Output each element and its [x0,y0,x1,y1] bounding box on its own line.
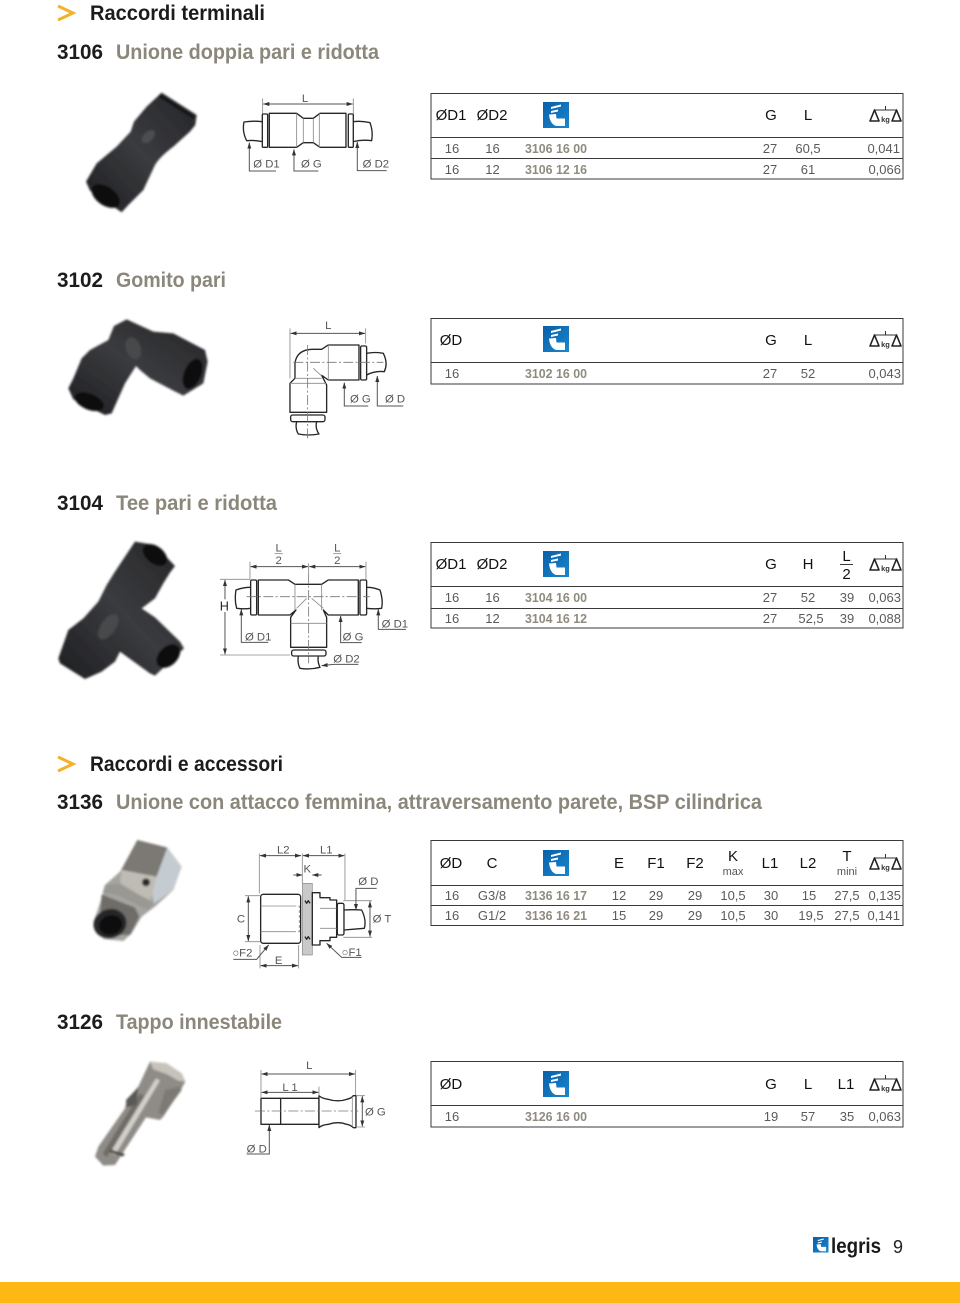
diagram: bulkhead 3136: E [275,955,283,967]
table 3136: 29 [688,888,702,903]
table 3106: 0,041 [867,141,900,156]
table 3104: 52,5 [798,611,824,626]
table 3136: 16 [445,888,459,903]
table 3106: 27 [763,141,777,156]
table 3136: 27,5 [834,888,860,903]
table 3136: 19,5 [798,908,824,923]
table 3106: 3106 12 16 [525,162,587,177]
table 3104: ØD2 [477,556,507,573]
table 3136: 30 [764,908,778,923]
table 3106: 16 [485,141,500,156]
table 3126: L1 [838,1076,854,1093]
diagram: bulkhead 3136: K [304,863,312,875]
table 3106: 0,066 [868,162,901,177]
table 3136: L1 [762,855,778,872]
table 3106: 61 [801,162,815,177]
diagram: plug 3126: Ø D [247,1143,267,1155]
table 3136: 12 [612,888,626,903]
table 3106: G [765,107,777,124]
table 3126: 57 [801,1109,815,1124]
diagram: union 3106: Ø D2 [363,158,389,170]
table 3104: 16 [445,611,459,626]
table 3126 [431,1062,903,1127]
table 3136: 3136 16 21 [525,908,587,923]
diagram: union 3106 [243,93,389,171]
table 3136: 15 [612,908,626,923]
product title 3104: 3104 [57,492,103,515]
table 3106: 60,5 [795,141,821,156]
section heading: Raccordi e accessori: Raccordi e accessori [90,753,283,776]
table 3104: 2 [842,566,851,583]
table 3102: 3102 16 00 [525,366,587,381]
diagram: tee 3104: Ø D1 [245,631,271,643]
table 3136: K [728,848,738,865]
table 3104: 39 [840,590,854,605]
table 3104: 16 [485,590,500,605]
diagram: bulkhead 3136 [232,844,391,968]
table 3104: 39 [840,611,854,626]
table 3106: 16 [445,141,459,156]
table 3102: ØD [440,332,462,349]
table 3102: kg [881,340,890,349]
table 3126: 0,063 [868,1109,901,1124]
photo: union fitting 3106 [86,93,197,213]
diagram: plug 3126: L [306,1060,312,1072]
diagram: union 3106: Ø D1 [253,159,280,171]
table 3104: 12 [485,611,500,626]
table 3104: 52 [801,590,815,605]
diagram: tee 3104 [220,542,408,669]
product title 3106: Unione doppia pari e ridotta [116,41,379,64]
diagram: tee 3104: L [334,542,340,554]
diagram: tee 3104: L [275,542,282,554]
diagram: tee 3104: 2 [275,555,282,567]
table 3104: 3104 16 00 [525,590,587,605]
logo: legris [813,1235,881,1258]
diagram: tee 3104: Ø D1 [382,619,408,631]
table 3106: kg [881,115,890,124]
table 3104: 27 [763,590,777,605]
table 3102: 16 [445,366,459,381]
table 3106: 12 [485,162,500,177]
section heading: Raccordi terminali: Raccordi terminali [90,2,265,25]
table 3104: 16 [445,590,459,605]
product title 3102: 3102 [57,269,103,292]
photo: bulkhead fitting 3136 [90,840,182,942]
diagram: tee 3104: H [220,599,229,613]
product title 3136: 3136 [57,791,103,814]
table 3136: T [842,848,852,865]
table 3106: 3106 16 00 [525,141,587,156]
product title 3126: 3126 [57,1011,103,1034]
table 3104: 3104 16 12 [525,611,587,626]
diagram: bulkhead 3136: ○F1 [342,947,362,959]
product title 3104: Tee pari e ridotta [116,492,277,515]
logo: legris: legris [831,1235,881,1258]
table 3106: ØD2 [477,107,507,124]
table 3136: F1 [647,855,665,872]
table 3126: L [804,1076,812,1093]
table 3126: kg [881,1084,890,1093]
table 3136: 29 [649,908,663,923]
diagram: elbow 3102: L [325,320,331,332]
table 3104: kg [881,564,890,573]
product title 3102: Gomito pari [116,269,226,292]
table 3136: 30 [764,888,778,903]
table 3136: 0,141 [867,908,900,923]
photo: elbow fitting 3102 [68,319,208,415]
table 3102: 27 [763,366,777,381]
table 3136: 29 [649,888,663,903]
table 3136: mini [837,866,857,878]
table 3104: H [803,556,813,573]
footer bar [0,1282,960,1303]
table 3136: L2 [800,855,816,872]
diagram: elbow 3102: Ø D [385,393,405,405]
page number: 9 [893,1237,903,1257]
table 3136: 27,5 [834,908,860,923]
table 3136: 15 [802,888,816,903]
diagram: bulkhead 3136: L2 [277,844,290,856]
table 3136: 10,5 [720,908,746,923]
product title 3126: Tappo innestabile [116,1011,282,1034]
product title 3106: 3106 [57,41,103,64]
table 3104 [431,542,903,628]
diagram: plug 3126: Ø G [365,1107,386,1119]
diagram: bulkhead 3136: Ø D [358,876,378,888]
table 3102 [431,318,903,384]
diagram: plug 3126: L 1 [282,1082,298,1094]
table 3104: 27 [763,611,777,626]
table 3102: 0,043 [868,366,901,381]
photo: plug 3126 [95,1062,185,1166]
table 3136: E [614,855,624,872]
table 3136: 10,5 [720,888,746,903]
table 3136: kg [881,863,890,872]
table 3126: 3126 16 00 [525,1109,587,1124]
diagram: tee 3104: Ø G [343,631,363,643]
diagram: plug 3126 [247,1060,386,1155]
table 3102: 52 [801,366,815,381]
table 3106: 27 [763,162,777,177]
diagram: bulkhead 3136: Ø T [373,914,391,926]
table 3102: L [804,332,812,349]
diagram: bulkhead 3136: ○F2 [232,948,252,960]
photo: tee fitting 3104 [58,540,185,679]
table 3102: G [765,332,777,349]
table 3136: ØD [440,855,462,872]
table 3106 [431,94,903,179]
table 3136: F2 [686,855,704,872]
table 3136: max [723,866,744,878]
table 3136: G1/2 [478,908,506,923]
table 3136: 0,135 [868,888,901,903]
table 3136: 29 [688,908,702,923]
diagram: bulkhead 3136: C [237,914,245,926]
table 3126: 16 [445,1109,459,1124]
table 3104: 0,063 [868,590,901,605]
diagram: union 3106: Ø G [301,159,322,171]
table 3136 [431,840,903,926]
product title 3102 [57,269,226,292]
table 3136: 16 [445,908,459,923]
diagram: tee 3104: 2 [334,555,340,567]
diagram: elbow 3102 [290,320,405,438]
diagram: tee 3104: Ø D2 [333,654,360,666]
table 3104: ØD1 [436,556,466,573]
table 3126: ØD [440,1076,462,1093]
table 3126: G [765,1076,777,1093]
table 3104: 0,088 [868,611,901,626]
diagram: union 3106: L [302,93,308,105]
table 3136: 3136 16 17 [525,888,587,903]
table 3106: L [804,107,812,124]
table 3136: C [487,855,498,872]
table 3126: 35 [840,1109,854,1124]
table 3136: G3/8 [478,888,506,903]
table 3106: ØD1 [436,107,466,124]
table 3104: G [765,556,777,573]
product title 3136: Unione con attacco femmina, attraversamento parete, BSP cilindrica [116,791,762,814]
table 3106: 16 [445,162,459,177]
diagram: elbow 3102: Ø G [350,393,371,405]
diagram: bulkhead 3136: L1 [320,844,333,856]
table 3104: L [842,548,851,565]
table 3126: 19 [764,1109,778,1124]
